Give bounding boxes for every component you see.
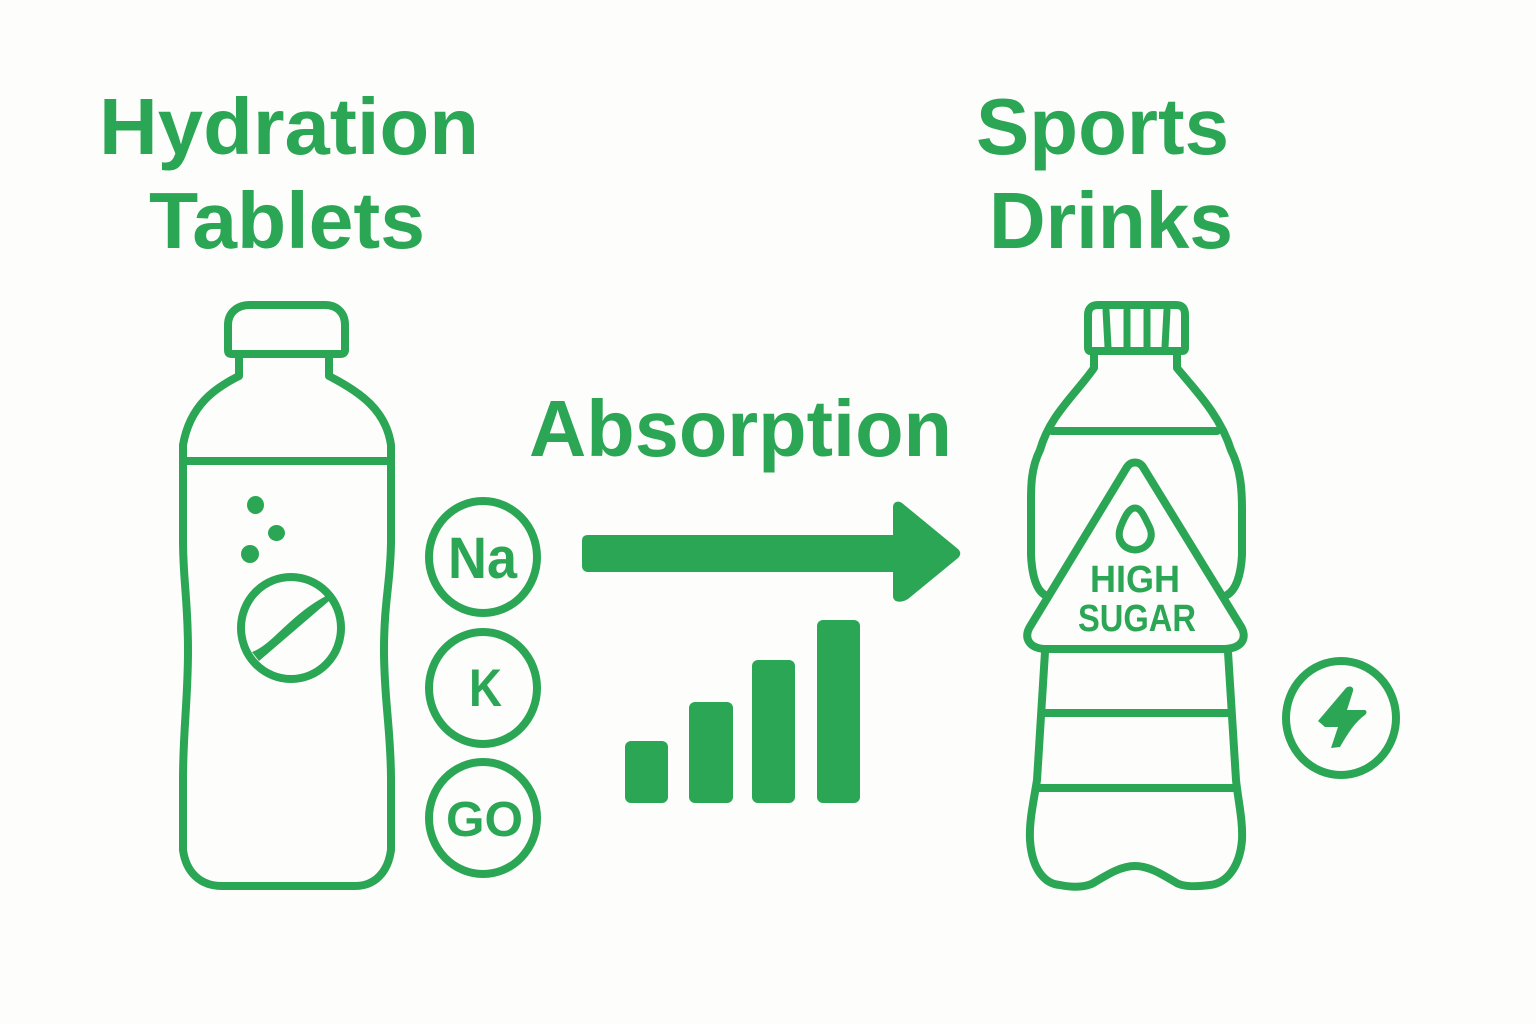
arrow: absorption direction [582,502,960,602]
heading: Hydration Tablets: Tablets [149,176,425,265]
heading: Hydration Tablets: Hydration [99,82,479,171]
icon: sports drink bottle [1030,305,1242,887]
label: HIGH SUGAR: SUGAR [1078,598,1196,640]
icon: high sugar warning triangle [1027,462,1244,649]
panel: hydration tablets [99,82,537,886]
icon: potassium badge: K [469,659,502,718]
icon: sodium badge: Na [448,526,518,591]
panel: absorption comparison [529,384,960,803]
label: HIGH SUGAR: HIGH [1090,559,1180,601]
icon: dissolving tablet [241,577,341,679]
heading: Sports Drinks [976,82,1233,265]
icon: energy badge [1286,661,1396,775]
icon: bubbles [241,496,285,563]
panel: sports drinks [976,82,1396,887]
icon: GO badge [429,762,537,874]
label: HIGH SUGAR [1078,559,1196,640]
heading: Sports Drinks: Sports [976,82,1229,171]
heading: Sports Drinks: Drinks [989,176,1233,265]
heading: Hydration Tablets [99,82,479,265]
icon: sodium badge [429,501,537,613]
icon: sugar drop [1119,508,1151,550]
heading: Absorption: Absorption [529,384,952,473]
icon: potassium badge [429,632,537,744]
icon: GO badge: GO [446,793,523,847]
bar chart: rising absorption [625,620,860,803]
icon: hydration bottle [183,305,391,886]
